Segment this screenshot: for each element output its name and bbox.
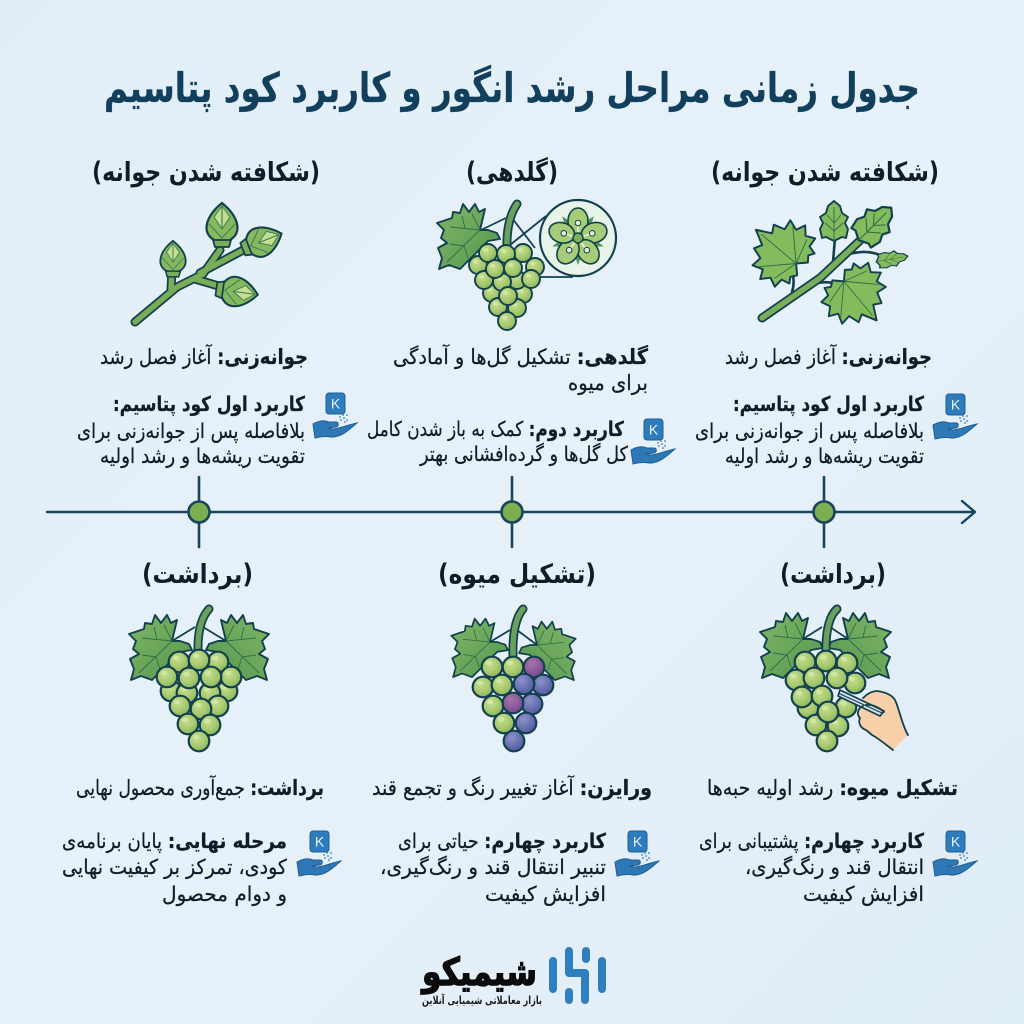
fertilizer text: مرحله نهایی: پایان برنامه‌ی xyxy=(62,829,287,853)
stage text: برای میوه xyxy=(568,371,648,395)
icon: potassium in hand xyxy=(313,393,357,438)
stage text: جوانه‌زنی: آغاز فصل رشد xyxy=(100,344,308,369)
icon: potassium in hand: K xyxy=(951,834,961,850)
fertilizer text xyxy=(62,829,287,906)
fertilizer text: تقویت ریشه‌ها و رشد اولیه xyxy=(100,444,305,468)
illustration: ripening grape cluster xyxy=(451,609,576,751)
illustration: grape cluster with hand and tweezers xyxy=(760,609,908,751)
panel: harvest, bottom right xyxy=(699,559,977,906)
fertilizer text: انتقال قند و رنگ‌گیری، xyxy=(745,855,924,879)
fertilizer text xyxy=(77,392,305,468)
fertilizer text xyxy=(367,417,628,466)
fertilizer text: بلافاصله پس از جوانه‌زنی برای xyxy=(77,419,305,443)
stage text: جوانه‌زنی: آغاز فصل رشد xyxy=(725,344,932,369)
icon: potassium in hand: K xyxy=(331,396,341,412)
fertilizer text: کاربرد اول کود پتاسیم: xyxy=(113,392,305,416)
stage text: برداشت: جمع‌آوری محصول نهایی xyxy=(76,775,324,800)
logo mark xyxy=(553,951,602,1000)
fertilizer text: افزایش کیفیت xyxy=(485,882,606,906)
icon: potassium in hand xyxy=(933,394,977,439)
fertilizer text: تنبیر انتقال قند و رنگ‌گیری، xyxy=(380,855,606,879)
logo tagline: بازار معاملاتی شیمیایی آنلاین xyxy=(422,993,542,1007)
illustration: budding shoot xyxy=(135,203,287,322)
fertilizer text: تقویت ریشه‌ها و رشد اولیه xyxy=(725,444,924,468)
fertilizer text: کاربرد دوم: کمک به باز شدن کامل xyxy=(367,417,624,441)
fertilizer text xyxy=(380,829,606,906)
fertilizer text: کل گل‌ها و گرده‌افشانی بهتر xyxy=(419,442,628,466)
heading: (شکافته شدن جوانه) xyxy=(92,157,320,188)
timeline arrow xyxy=(47,477,975,547)
panel: harvest, bottom left xyxy=(62,559,341,906)
panel: bud break, top right xyxy=(695,157,977,468)
icon: potassium in hand xyxy=(615,831,659,876)
illustration: leafy shoot xyxy=(733,196,909,342)
heading: (برداشت) xyxy=(142,559,253,590)
logo wordmark: شیمیکو xyxy=(420,950,537,994)
stage text: تشکیل میوه: رشد اولیه حبه‌ها xyxy=(707,776,958,800)
icon: potassium in hand: K xyxy=(633,834,643,850)
heading: (گلدهی) xyxy=(466,156,558,188)
icon: potassium in hand: K xyxy=(951,396,961,412)
heading: (شکافته شدن جوانه) xyxy=(711,157,939,188)
fertilizer text: کاربرد اول کود پتاسیم: xyxy=(733,392,924,416)
panel: flowering, top centre xyxy=(367,156,675,466)
icon: potassium in hand xyxy=(631,419,675,464)
heading: (تشکیل میوه) xyxy=(438,559,596,590)
fertilizer text: افزایش کیفیت xyxy=(803,882,924,906)
fertilizer text xyxy=(699,829,924,906)
illustration: grape cluster with flower inset xyxy=(437,200,616,330)
fertilizer text: کاربرد چهارم: حیاتی برای xyxy=(398,829,606,853)
panel: bud break, top left xyxy=(77,157,357,468)
stage text: ورایزن: آغاز تغییر رنگ و تجمع قند xyxy=(372,775,652,800)
fertilizer text xyxy=(695,392,924,468)
stage text xyxy=(393,344,649,395)
fertilizer text: کاربرد چهارم: پشتیبانی برای xyxy=(699,829,924,853)
fertilizer text: بلافاصله پس از جوانه‌زنی برای xyxy=(695,419,924,443)
stage text: گلدهی: تشکیل گل‌ها و آمادگی xyxy=(393,344,649,369)
icon: potassium in hand: K xyxy=(649,422,659,438)
logo xyxy=(420,950,602,1007)
icon: potassium in hand xyxy=(297,831,341,876)
icon: potassium in hand: K xyxy=(315,834,325,850)
fertilizer text: و دوام محصول xyxy=(162,882,287,906)
heading: (برداشت) xyxy=(780,559,886,590)
fertilizer text: کودی، تمرکز بر کیفیت نهایی xyxy=(62,855,287,879)
illustration: ripe grape cluster xyxy=(129,609,269,751)
panel: fruit set, bottom centre xyxy=(372,559,659,906)
icon: potassium in hand xyxy=(933,831,977,876)
